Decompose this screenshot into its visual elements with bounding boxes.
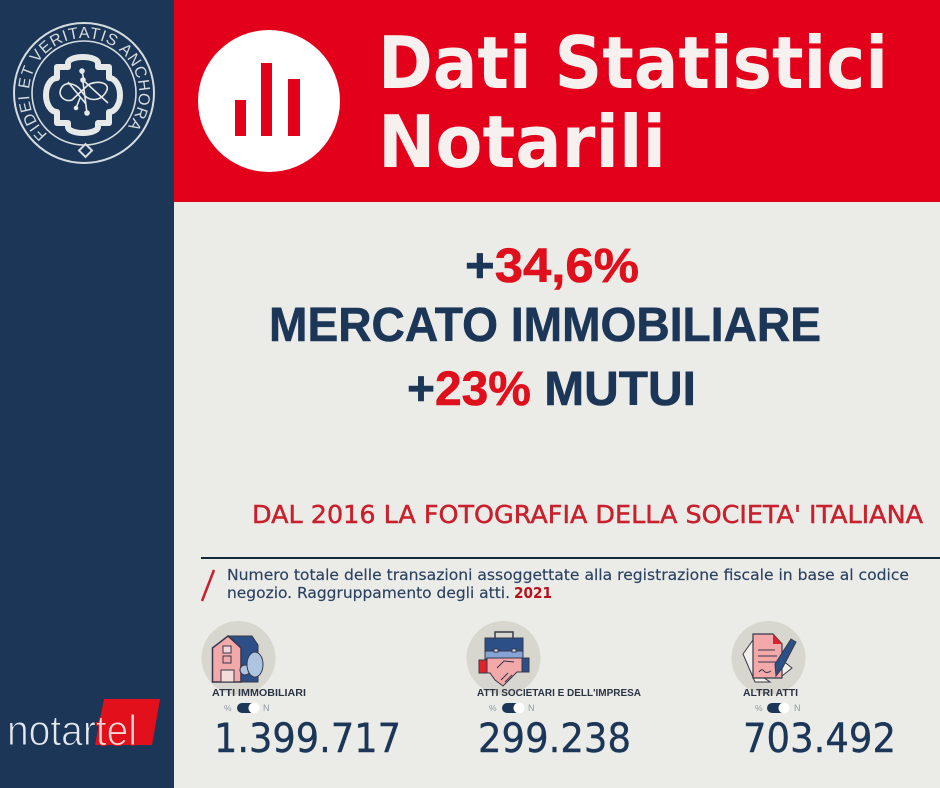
subtitle: DAL 2016 LA FOTOGRAFIA DELLA SOCIETA' ITALIANA xyxy=(252,500,923,529)
red slash xyxy=(202,570,214,601)
description block xyxy=(201,557,940,602)
value: 1.399.717 xyxy=(214,716,401,762)
label: ATTI SOCIETARI E DELL'IMPRESA xyxy=(477,688,641,699)
icon: bar chart in white circle xyxy=(198,30,340,172)
value: 299.238 xyxy=(478,716,631,762)
icon: document and pen xyxy=(732,621,806,695)
stat: altri atti xyxy=(732,621,896,762)
panel: navy sidebar xyxy=(0,0,174,788)
panel: red header xyxy=(174,0,940,202)
description text: negozio. Raggruppamento degli atti. xyxy=(227,584,510,602)
toggle xyxy=(755,702,800,714)
icon: house xyxy=(202,621,276,695)
icon: notary seal xyxy=(13,22,155,164)
toggle: N xyxy=(794,703,800,713)
description text: Numero totale delle transazioni assoggettate alla registrazione fiscale in base al codice xyxy=(227,566,909,584)
toggle: N xyxy=(263,703,270,713)
title xyxy=(378,21,888,184)
stat: atti immobiliari xyxy=(202,621,401,762)
label: ATTI IMMOBILIARI xyxy=(212,688,306,699)
seal diamond xyxy=(79,144,92,157)
seal quatrefoil xyxy=(46,57,120,133)
toggle: % xyxy=(489,703,497,713)
toggle xyxy=(224,702,270,714)
headline: key figures: +34,6% xyxy=(465,240,639,293)
toggle xyxy=(489,702,534,714)
toggle: N xyxy=(528,703,534,713)
toggle: % xyxy=(224,703,232,713)
icon: briefcase and handshake xyxy=(466,621,540,695)
description text xyxy=(227,566,909,602)
value: 703.492 xyxy=(743,716,896,762)
headline: key figures: MERCATO IMMOBILIARE xyxy=(269,299,821,352)
description text: 2021 xyxy=(514,584,552,602)
label: ALTRI ATTI xyxy=(743,688,798,699)
title: Notarili xyxy=(378,100,666,184)
seal monogram xyxy=(60,69,108,115)
toggle: % xyxy=(755,703,763,713)
headline: key figures: +23% MUTUI xyxy=(407,363,696,416)
stat: atti societari xyxy=(466,621,641,762)
title: Dati Statistici xyxy=(378,21,888,105)
headline: key figures xyxy=(269,240,821,416)
seal motto: FIDEI ET VERITATIS ANCHORA xyxy=(18,27,150,142)
logo: notartel: notartel xyxy=(7,707,137,755)
